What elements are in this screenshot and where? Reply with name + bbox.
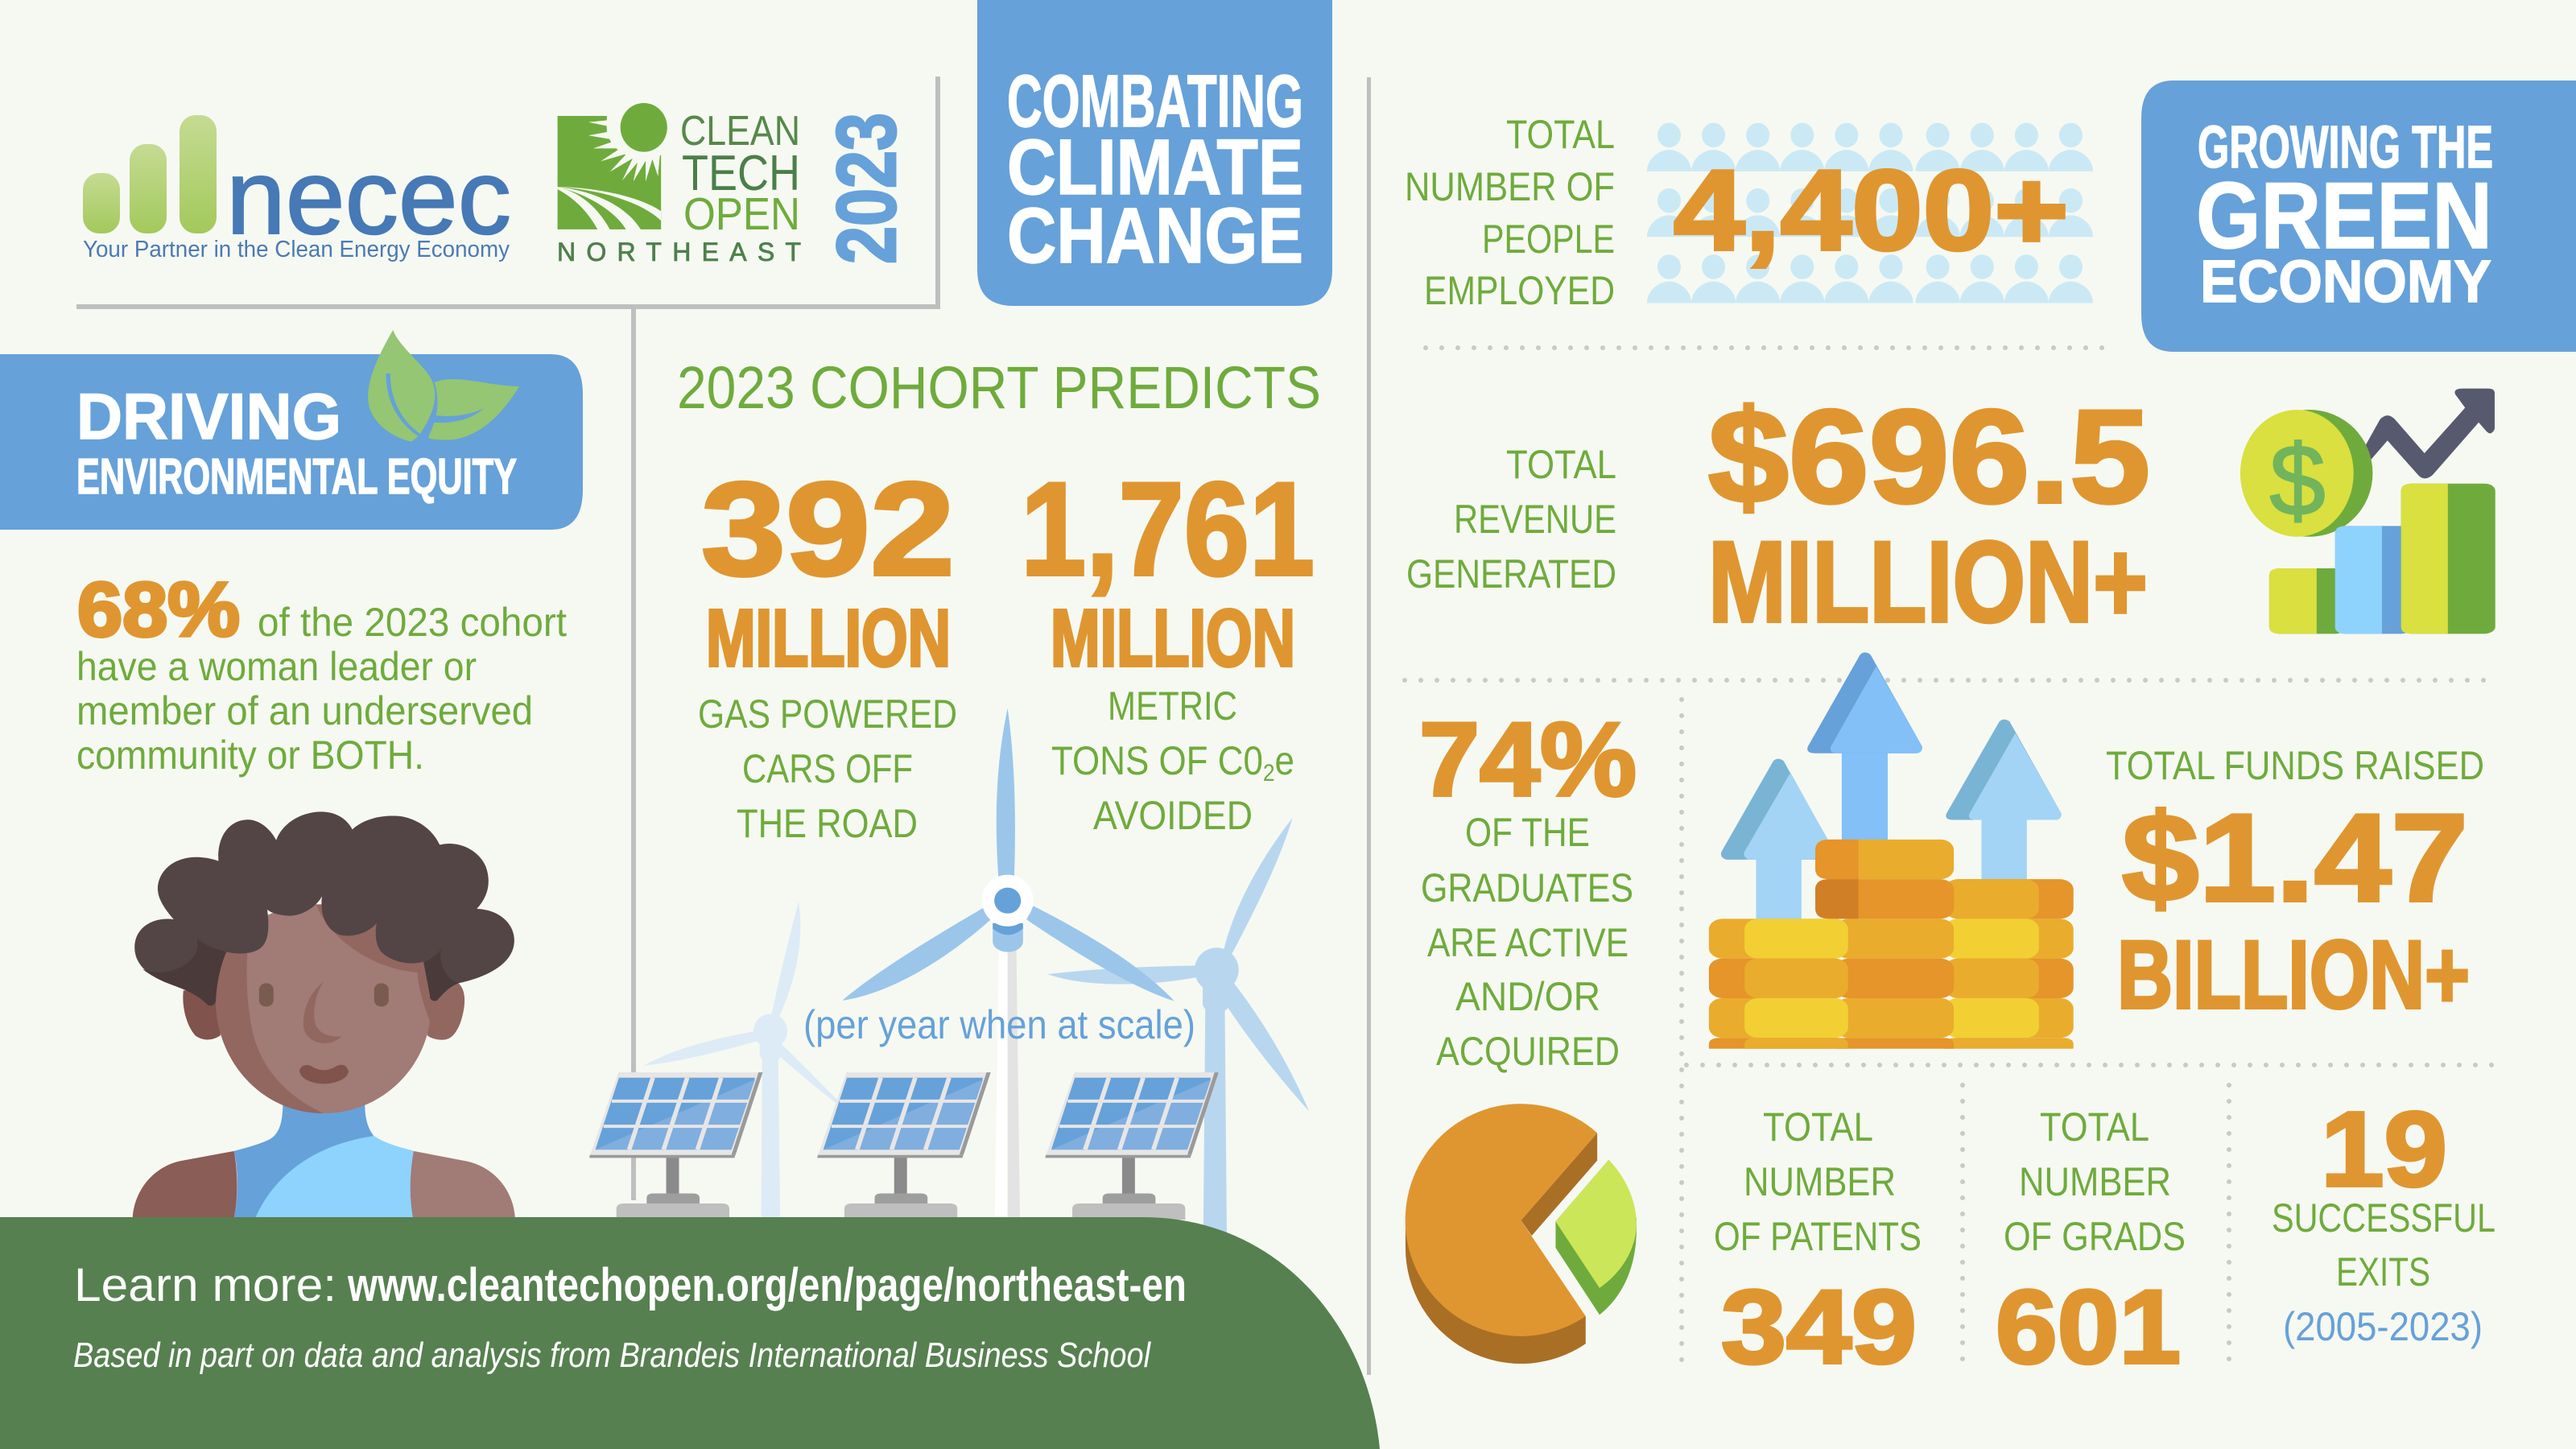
stat: total number of grads: [1996, 1104, 2186, 1385]
stat: 74 percent of graduates: ACQUIRED: [1436, 1029, 1620, 1074]
stat: 74 percent of graduates: [1419, 700, 1637, 1074]
stat: 696.5 million: [1708, 382, 2150, 646]
stat: 392 million cars: CARS OFF: [742, 746, 913, 791]
stat: 4,400+: 4,400+: [1674, 147, 2069, 275]
banner: growing the green economy: ECONOMY: [2200, 248, 2491, 315]
banner: growing the green economy: GREEN: [2196, 163, 2492, 268]
logo: necec: Your Partner in the Clean Energy Economy: [83, 237, 510, 262]
stat: total funds raised: BILLION+: [2117, 921, 2470, 1029]
stat: 1,761 million metric tons: e: [1275, 738, 1294, 783]
dotted dividers: [1405, 348, 2497, 1371]
stat: 68 percent cohort text: have a woman leader or: [76, 644, 477, 689]
stat: 74 percent of graduates: 74%: [1419, 700, 1637, 818]
illustration: left wind turbine: [643, 902, 840, 1220]
logo: Clean Tech Open Northeast: TECH: [682, 146, 800, 201]
logo: necec: [83, 115, 511, 262]
stat label: people employed: PEOPLE: [1482, 217, 1615, 262]
banner: combating climate change: [977, 0, 1332, 306]
banner: driving environmental equity: ENVIRONMENTAL EQUITY: [76, 449, 517, 505]
stat label: people employed: EMPLOYED: [1424, 268, 1615, 313]
stat: total number of grads: 601: [1996, 1268, 2181, 1385]
stat: 392 million cars: MILLION: [706, 593, 951, 683]
stat label: people employed: NUMBER OF: [1405, 164, 1615, 209]
logo: Clean Tech Open Northeast: CLEAN: [680, 108, 800, 155]
stat: 74 percent of graduates: AND/OR: [1455, 974, 1600, 1019]
illustration: woman: [133, 811, 515, 1217]
stat label: revenue generated: TOTAL: [1506, 442, 1616, 487]
stat: total number of patents: 349: [1721, 1268, 1917, 1385]
stat: 19 successful exits: (2005-2023): [2283, 1304, 2483, 1349]
stat: 1,761 million metric tons: TONS OF C0: [1051, 738, 1292, 783]
arrow: left: [1721, 759, 1832, 921]
stat: total number of grads: TOTAL: [2040, 1104, 2149, 1150]
stat: 696.5 million: MILLION+: [1708, 518, 2148, 646]
stat: 392 million cars: THE ROAD: [737, 801, 918, 846]
illustration: right wind turbine: [1047, 818, 1309, 1237]
stat label: revenue generated: REVENUE: [1454, 497, 1616, 542]
stat: 19 successful exits: 19: [2321, 1090, 2447, 1208]
logo emblem: [558, 96, 681, 229]
stat label: revenue generated: [1406, 442, 1616, 597]
heading: 2023 cohort predicts: 2023 COHORT PREDICTS: [677, 354, 1321, 421]
banner: driving environmental equity: DRIVING: [76, 381, 341, 453]
stat: total number of patents: NUMBER: [1744, 1159, 1896, 1204]
arrow: right: [1946, 720, 2062, 881]
logo: Clean Tech Open Northeast: NORTHEAST: [557, 237, 801, 266]
stat label: revenue generated: GENERATED: [1406, 551, 1616, 597]
banner: combating climate change: CHANGE: [1007, 192, 1303, 279]
chart: pie: [1406, 1104, 1637, 1364]
stat: 392 million cars: 392: [701, 455, 955, 603]
stat: total number of patents: TOTAL: [1763, 1104, 1873, 1150]
stat: total number of grads: OF GRADS: [2004, 1214, 2186, 1259]
footer band: [0, 1217, 1380, 1449]
stat: total number of grads: NUMBER: [2019, 1159, 2171, 1204]
stat: total funds raised: [2106, 743, 2484, 1029]
icon: growth chart and coin: [2240, 389, 2496, 634]
stat label: people employed: [1405, 112, 1615, 313]
stat: 68 percent cohort text: 68%: [77, 567, 240, 653]
stat: 392 million cars: GAS POWERED: [698, 691, 957, 737]
banner: combating climate change: COMBATING: [1007, 60, 1303, 142]
stat: 68 percent cohort text: member of an underserved: [76, 688, 533, 733]
footer band: www.cleantechopen.org/en/page/northeast-en: [347, 1259, 1187, 1311]
stat: total number of patents: [1714, 1104, 1922, 1385]
stat: 68 percent cohort text: [76, 567, 567, 778]
logo: necec: necec: [226, 138, 511, 256]
stat: 1,761 million metric tons: 1,761: [1021, 455, 1315, 603]
banner: combating climate change: CLIMATE: [1007, 123, 1303, 211]
frame dividers: [76, 76, 1371, 1375]
stat: total funds raised: TOTAL FUNDS RAISED: [2106, 743, 2484, 788]
stat: 68 percent cohort text: community or BOTH.: [76, 733, 424, 778]
icon: growth chart and coin: $: [2269, 425, 2326, 537]
stat label: people employed: TOTAL: [1506, 112, 1615, 157]
footer band: Based in part on data and analysis from Brandeis International Business School: [73, 1335, 1151, 1375]
banner: growing the green economy: [2141, 80, 2576, 352]
stat: total funds raised: $1.47: [2122, 788, 2468, 927]
stat: 1,761 million metric tons: AVOIDED: [1093, 793, 1253, 838]
stat: 1,761 million metric tons: METRIC: [1108, 683, 1237, 729]
illustration: solar panels: [589, 1072, 1219, 1220]
note: per year when at scale: (per year when at scale): [803, 1002, 1195, 1047]
stat: 74 percent of graduates: OF THE: [1465, 810, 1590, 855]
stat: 1,761 million metric tons: [1021, 455, 1315, 838]
stat: 1,761 million metric tons: 2: [1263, 760, 1275, 786]
stat: total number of patents: OF PATENTS: [1714, 1214, 1922, 1259]
stat: 1,761 million metric tons: MILLION: [1051, 593, 1295, 683]
icon: leaves: [368, 330, 519, 442]
banner: driving environmental equity: [0, 330, 583, 530]
stat: 68 percent cohort text: of the 2023 cohort: [258, 600, 567, 645]
stat: 74 percent of graduates: ARE ACTIVE: [1427, 920, 1629, 965]
icon: crowd of people: [1647, 123, 2093, 303]
arrow: center: [1807, 653, 1922, 841]
stat: 19 successful exits: SUCCESSFUL: [2272, 1195, 2496, 1241]
year 2023: 2023: [820, 113, 914, 264]
footer band: Learn more:: [74, 1259, 336, 1311]
stat: 19 successful exits: [2272, 1090, 2496, 1349]
stat: 19 successful exits: EXITS: [2336, 1249, 2430, 1294]
coin stacks: [1709, 840, 2074, 1049]
stat: 74 percent of graduates: GRADUATES: [1421, 865, 1633, 910]
logo: Clean Tech Open Northeast: OPEN: [683, 188, 800, 240]
stat: 696.5 million: $696.5: [1708, 382, 2150, 530]
logo: Clean Tech Open Northeast: [557, 96, 801, 266]
stat: 392 million cars: [698, 455, 957, 846]
illustration: center wind turbine: [842, 708, 1174, 1220]
illustration: arrows and coin stacks: [1709, 653, 2074, 1049]
